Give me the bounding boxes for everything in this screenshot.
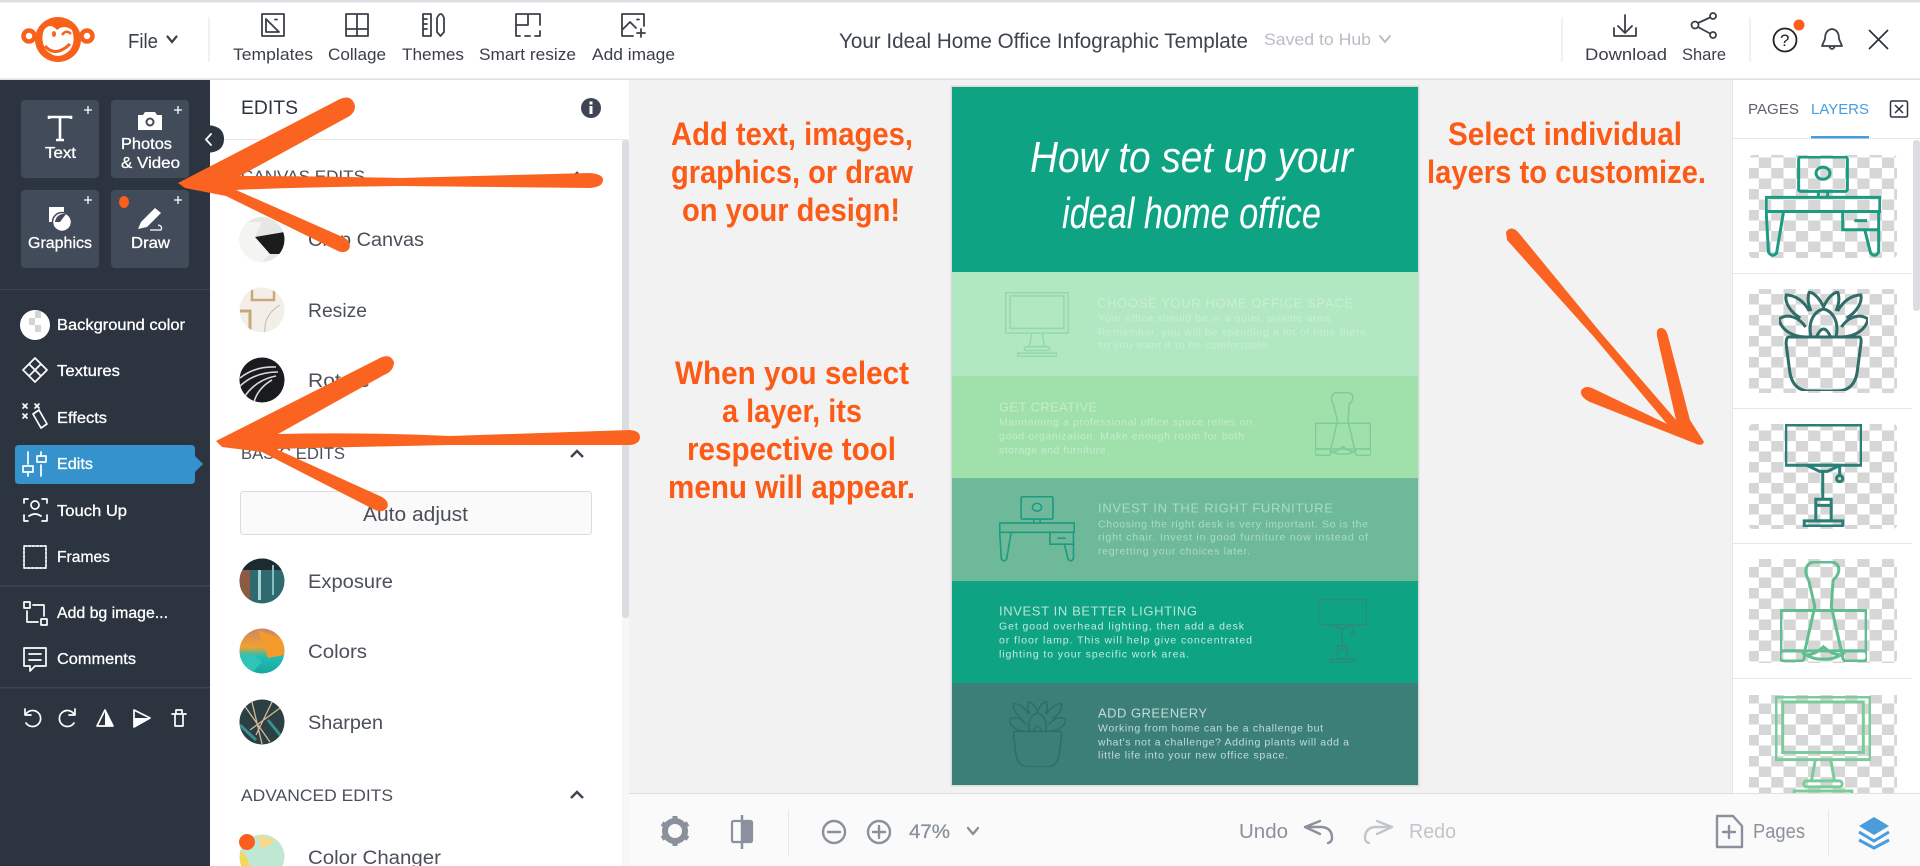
- tool: add image: [592, 14, 675, 64]
- section 4: better lighting: lighting to your specific work area.: [999, 648, 1189, 660]
- section 5: add greenery: little life into your new office space.: [1098, 750, 1288, 762]
- bottom toolbar: [629, 793, 1920, 866]
- item: resize: Resize: [308, 301, 367, 322]
- item: exposure: [240, 558, 393, 604]
- panel: edits: [210, 80, 629, 866]
- share: [1682, 13, 1726, 64]
- panel close button: [1890, 101, 1908, 117]
- arrow: to tool buttons: [178, 98, 603, 252]
- button: auto adjust: Auto adjust: [363, 504, 468, 526]
- edits heading: EDITS: [241, 98, 298, 119]
- section 4: better lighting: or floor lamp. This will help give concentrated: [999, 634, 1252, 646]
- info icon: [581, 98, 601, 118]
- icon: desk: [1000, 497, 1074, 561]
- section: basic edits: BASIC EDITS: [241, 444, 345, 463]
- callout: select a layer: a layer, its: [722, 393, 862, 429]
- callout: select a layer: menu will appear.: [668, 469, 915, 505]
- icon: monitor: [1006, 293, 1068, 356]
- menu: background color: [20, 310, 186, 340]
- menu: add bg image: [24, 602, 168, 625]
- button: graphics: [21, 190, 99, 268]
- section 5: add greenery: what's not a challenge? Adding plants will add a: [1097, 736, 1349, 748]
- section 4: better lighting: [952, 581, 1418, 683]
- canvas workspace: [629, 79, 1732, 793]
- menu: textures: Textures: [57, 363, 120, 380]
- undo: Undo: [1239, 821, 1288, 843]
- button: draw: Draw: [131, 235, 170, 252]
- layers button: [1859, 817, 1889, 848]
- tool: collage: Collage: [328, 45, 386, 64]
- button: text: Text: [45, 145, 77, 162]
- callout: select layers: [1427, 116, 1706, 190]
- callout: add text: graphics, or draw: [671, 154, 913, 190]
- tab: layers active: [1811, 101, 1869, 138]
- top toolbar: [0, 0, 1920, 80]
- tool: collage: [328, 14, 386, 64]
- layer thumbnail: binder clip: [1749, 559, 1897, 663]
- section 3: right furniture: right chair. Invest in good furniture now instead of: [1098, 532, 1368, 544]
- tool: themes: [402, 14, 464, 64]
- menu: comments: Comments: [57, 651, 136, 668]
- pages button: [1717, 816, 1805, 847]
- item: exposure: Exposure: [308, 572, 393, 593]
- section 1: office space: CHOOSE YOUR HOME OFFICE SPACE: [1097, 296, 1353, 310]
- section 2: get creative: Maintaining a professional office space relies on: [999, 416, 1252, 428]
- item: colors: Colors: [308, 642, 367, 663]
- zoom controls: [823, 821, 978, 843]
- menu: background color: Background color: [57, 317, 186, 334]
- menu: frames: Frames: [57, 549, 110, 566]
- icon: split view: [732, 815, 752, 849]
- item: sharpen: Sharpen: [308, 713, 383, 734]
- tool: templates: Templates: [233, 45, 313, 64]
- sidebar collapse handle: [205, 125, 224, 153]
- button: photos and video: Photos: [121, 136, 172, 153]
- menu: edits active: Edits: [57, 456, 93, 473]
- menu: touch up: Touch Up: [57, 503, 127, 520]
- document title: Your Ideal Home Office Infographic Template: [839, 30, 1248, 53]
- section: canvas edits: [241, 167, 583, 186]
- section 3: right furniture: [952, 478, 1418, 581]
- icon: binder clip: [1315, 393, 1371, 455]
- download: Download: [1585, 45, 1667, 64]
- arrow: to edits menu: [216, 356, 640, 511]
- callout: select a layer: [668, 355, 915, 505]
- tab: layers active: LAYERS: [1811, 101, 1869, 118]
- layer thumbnail: desk: [1749, 155, 1897, 258]
- callout: add text: on your design!: [682, 192, 900, 228]
- button: photos and video: [111, 100, 189, 178]
- icon: lamp: [1318, 600, 1367, 662]
- section 5: add greenery: Working from home can be a challenge but: [1098, 722, 1323, 734]
- section: advanced edits: [241, 786, 583, 805]
- help icon: ?: [1780, 31, 1789, 50]
- redo: Redo: [1409, 821, 1456, 843]
- callout: add text: Add text, images,: [671, 116, 913, 152]
- section: basic edits: [241, 444, 583, 463]
- infographic header: ideal home office: [1062, 189, 1321, 238]
- item: rotate: [240, 358, 370, 402]
- share: Share: [1682, 45, 1726, 64]
- section: canvas edits: CANVAS EDITS: [241, 167, 365, 186]
- menu: comments: [24, 648, 136, 671]
- section 3: right furniture: regretting your choices later.: [1098, 546, 1250, 558]
- menu: frames: [24, 546, 110, 568]
- item: color changer: [239, 834, 442, 866]
- layer thumbnail: succulent: [1749, 289, 1897, 393]
- menu: effects: Effects: [57, 410, 107, 427]
- section 2: get creative: [952, 376, 1418, 478]
- tool: add image: Add image: [592, 45, 675, 64]
- callout: select a layer: When you select: [675, 355, 909, 391]
- section 5: add greenery: ADD GREENERY: [1098, 706, 1207, 720]
- tool: templates: [233, 14, 313, 64]
- button: draw: [111, 190, 189, 268]
- infographic header: How to set up your: [1030, 133, 1355, 182]
- callout: add text: [671, 116, 913, 228]
- button: auto adjust: [240, 492, 592, 534]
- callout: select layers: layers to customize.: [1427, 154, 1706, 190]
- icon: settings gear: [662, 816, 688, 846]
- section 4: better lighting: Get good overhead lighting, then add a desk: [999, 620, 1245, 632]
- menu: effects: [23, 404, 107, 428]
- infographic template preview: [950, 86, 1420, 786]
- section: advanced edits: ADVANCED EDITS: [241, 786, 393, 805]
- item: crop canvas: [240, 217, 424, 262]
- menu: textures: [23, 358, 120, 382]
- tab: pages: PAGES: [1748, 101, 1799, 118]
- section 1: office space: Your office should be in a quiet, private area.: [1098, 312, 1333, 324]
- section 1: office space: [952, 272, 1418, 376]
- button: photos and video: & Video: [121, 155, 180, 172]
- tool: themes: Themes: [402, 45, 464, 64]
- infographic header: [952, 87, 1418, 272]
- panel: layers: [1732, 80, 1920, 796]
- redo: [1365, 821, 1456, 843]
- layer thumbnail: lamp: [1749, 424, 1897, 529]
- button: text: [21, 100, 99, 178]
- item: resize: [240, 287, 367, 333]
- menu: add bg image: Add bg image...: [57, 605, 168, 622]
- tool: smart resize: [479, 14, 576, 64]
- left sidebar: [0, 80, 210, 866]
- section 2: get creative: storage and furniture.: [999, 444, 1109, 456]
- section 4: better lighting: INVEST IN BETTER LIGHTING: [999, 604, 1197, 618]
- item: rotate: Rotate: [308, 371, 370, 392]
- section 1: office space: Remember, you will be spending a lot of time there: [1098, 326, 1366, 338]
- section 2: get creative: good organization. Make enough room for both: [999, 430, 1244, 442]
- download: [1585, 15, 1667, 64]
- item: crop canvas: Crop Canvas: [308, 230, 424, 251]
- section 5: add greenery: [952, 683, 1418, 785]
- item: colors: [240, 628, 367, 675]
- callout: select a layer: respective tool: [687, 431, 896, 467]
- help icon: [1774, 20, 1804, 52]
- layer thumbnail: monitor: [1749, 695, 1897, 796]
- callout: select layers: Select individual: [1448, 116, 1682, 152]
- undo: [1239, 821, 1332, 843]
- file menu: File: [128, 31, 158, 53]
- item: sharpen: [240, 700, 383, 744]
- pages button: Pages: [1753, 821, 1805, 843]
- section 3: right furniture: Choosing the right desk is very important. So is the: [1098, 518, 1368, 530]
- saved status: Saved to Hub: [1264, 30, 1371, 49]
- button: graphics: Graphics: [28, 235, 92, 252]
- section 2: get creative: GET CREATIVE: [999, 400, 1097, 414]
- file menu: [128, 31, 176, 53]
- menu: edits active: [15, 445, 203, 484]
- zoom controls: 47%: [909, 822, 950, 843]
- section 1: office space: so you want it to be comfortable.: [1098, 340, 1270, 352]
- menu: touch up: [24, 499, 127, 521]
- bell icon: [1822, 29, 1842, 49]
- tool: smart resize: Smart resize: [479, 45, 576, 64]
- icon: succulent: [1009, 702, 1066, 767]
- logo: monkey: [24, 17, 92, 62]
- arrow: to layers panel: [1506, 228, 1704, 445]
- section 3: right furniture: INVEST IN THE RIGHT FURNITURE: [1098, 500, 1333, 516]
- action icons: undo redo flip delete: [25, 709, 186, 727]
- close icon: [1869, 30, 1888, 49]
